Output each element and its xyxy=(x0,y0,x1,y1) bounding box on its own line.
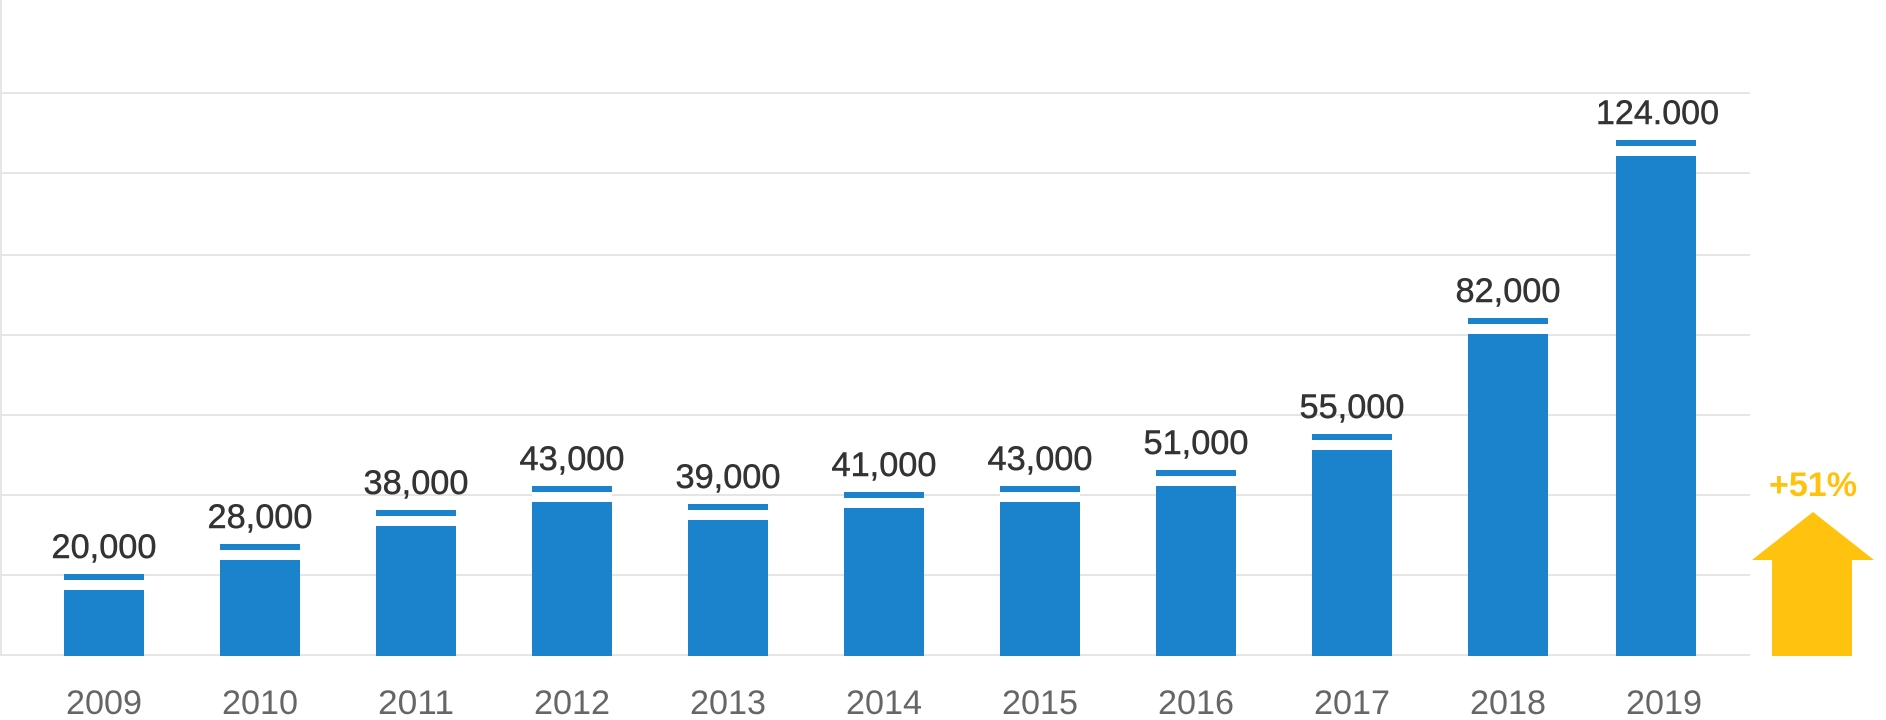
callout: +51% growth xyxy=(1752,466,1874,656)
icon: up arrow xyxy=(1752,512,1874,656)
bar: 2010 xyxy=(208,498,312,720)
bar: 2011: 38,000 xyxy=(364,464,468,502)
bar: 2018 xyxy=(1456,272,1560,720)
bar: 2018: 82,000 xyxy=(1456,272,1560,310)
bar: 2011 xyxy=(364,464,468,720)
bar: 2017 xyxy=(1300,388,1404,720)
bar: 2013: 39,000 xyxy=(676,458,780,496)
bar: 2010: 28,000 xyxy=(208,498,312,536)
bar: 2013 xyxy=(676,458,780,720)
bar: 2016: 51,000 xyxy=(1144,424,1248,462)
bar: 2012 xyxy=(520,440,624,720)
bar: 2015: 43,000 xyxy=(988,440,1092,478)
bar: 2015 xyxy=(988,440,1092,720)
bar: 2019 xyxy=(1596,94,1719,720)
bar: 2009 xyxy=(52,528,156,720)
bar: 2019: 124.000 xyxy=(1596,94,1719,132)
callout: +51% growth: +51% xyxy=(1769,466,1857,504)
bar: 2009: 20,000 xyxy=(52,528,156,566)
bar: 2017: 55,000 xyxy=(1300,388,1404,426)
bar: 2012: 43,000 xyxy=(520,440,624,478)
bar: 2014 xyxy=(832,446,936,720)
bar: 2014: 41,000 xyxy=(832,446,936,484)
bar: 2016 xyxy=(1144,424,1248,720)
